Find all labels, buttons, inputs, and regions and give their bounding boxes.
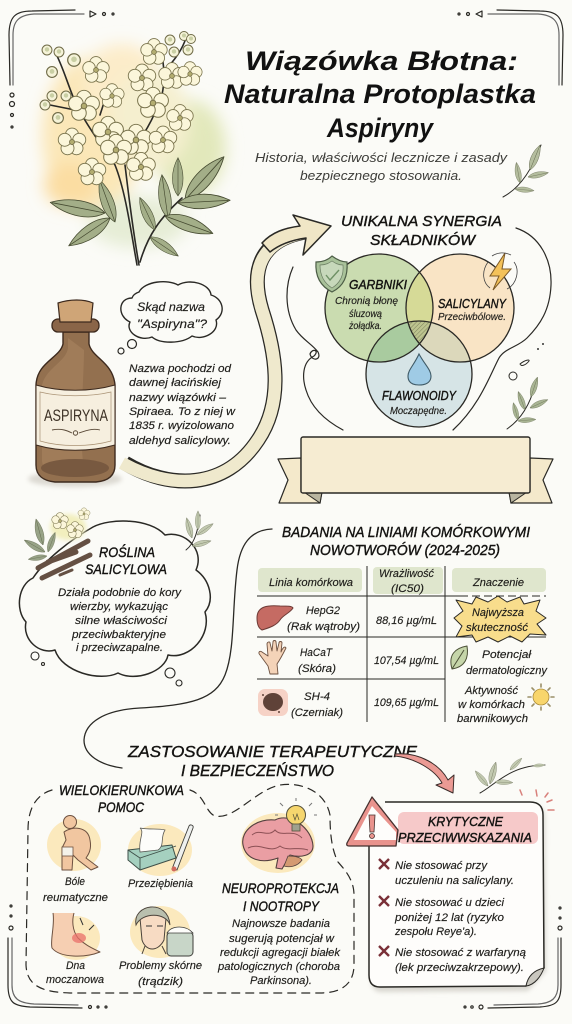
neuroprotection text: NEUROPROTEKCJA [222, 881, 339, 896]
item: warfarin [379, 946, 526, 974]
callout: highest efficacy [454, 596, 546, 642]
text block: name origin: Spiraea. To z niej w [129, 406, 236, 418]
venn: tannins: GARBNIKI [349, 278, 407, 292]
item: gout: Dna [66, 960, 85, 972]
title: Aspiryny [326, 113, 435, 143]
cloud bubbles [31, 652, 182, 686]
item: colds [128, 824, 193, 890]
item: gout [46, 913, 104, 986]
text block: name origin: dawnej łacińskiej [129, 377, 222, 389]
item: salicylate allergy [379, 859, 514, 887]
item: children [379, 896, 505, 938]
icon: hand [259, 640, 286, 674]
icon: sprig by subtitle [503, 144, 549, 197]
icon: sprig above panel [473, 756, 554, 810]
stems [50, 38, 186, 265]
callout: highest efficacy: Najwyższa [472, 607, 524, 619]
subtitle: bezpiecznego stosowania. [300, 169, 462, 183]
heading: studies: NOWOTWORÓW (2024-2025) [310, 542, 500, 559]
table header labels: Znaczenie [472, 577, 524, 589]
panel heading: POMOC [98, 800, 144, 815]
corner ornament: top left [9, 10, 114, 128]
icon: water drop [408, 354, 431, 385]
synergy outline curves [287, 228, 551, 430]
large curved arrow [122, 215, 331, 481]
item: skin problems: (trądzik) [138, 976, 183, 988]
row: SH-4: Aktywność [464, 685, 519, 697]
row: HepG2: 88,16 µg/mL [376, 615, 437, 627]
item: skin problems: Problemy skórne [119, 960, 202, 972]
row: HaCaT: Potencjał [482, 649, 532, 661]
row: HaCaT: (Skóra) [298, 663, 336, 675]
title: Naturalna Protoplastka [224, 79, 536, 109]
table: cell line studies [257, 566, 554, 725]
page curl [526, 968, 544, 986]
item: children: Nie stosować u dzieci [395, 897, 505, 909]
panel shadow and card [371, 806, 546, 992]
bottle collar [52, 319, 99, 332]
row: HaCaT [259, 640, 548, 677]
venn diagram [316, 253, 517, 427]
row: HaCaT: 107,54 µg/mL [374, 655, 439, 667]
panel heading: KRYTYCZNE [428, 814, 503, 829]
text block: name origin [129, 363, 236, 447]
icon: sprig right of venn [507, 343, 549, 429]
neuroprotection text: patologicznych (choroba [217, 961, 340, 973]
venn: tannins [335, 278, 407, 332]
venn: flavonoids: Moczapędne. [390, 406, 447, 417]
bottle label [36, 385, 115, 450]
icon: sun [528, 684, 554, 710]
cloud heading: ROŚLINA [99, 543, 155, 560]
panel: multidirectional help [26, 783, 354, 993]
item: colds: Przeziębienia [128, 878, 193, 890]
row: SH-4: w komórkach [458, 699, 525, 711]
ribbon banner [278, 437, 553, 503]
connector curve to therapeutic section [84, 529, 272, 768]
neuroprotection text: redukcji agregacji białek [220, 947, 341, 959]
title [224, 46, 536, 143]
heading: studies [282, 524, 530, 559]
icon: sprig right of cloud [184, 511, 215, 550]
cloud shape [19, 521, 210, 676]
icon: melanoma [258, 689, 288, 716]
illustration: meadowsweet plant [40, 32, 230, 265]
item: rheumatic pain: reumatyczne [43, 892, 108, 904]
bottle body [36, 332, 115, 482]
bottle label: ASPIRYNA [44, 406, 108, 425]
venn: flavonoids: FLAWONOIDY [382, 389, 457, 403]
neuroprotection text: I NOOTROPY [243, 899, 320, 914]
neuroprotection text: sugerują potencjał w [229, 933, 335, 945]
neuroprotection text: Najnowsze badania [232, 918, 330, 930]
pink heading band [398, 812, 538, 844]
venn: salicylates [438, 297, 507, 323]
corner ornament: top right [458, 10, 563, 85]
heading: synergy: SKŁADNIKÓW [370, 232, 476, 249]
cloud text: wierzby, wykazując [70, 601, 169, 613]
cloud text: i przeciwzapalne. [76, 642, 163, 654]
cloud text: przeciwbakteryjne [71, 629, 166, 641]
panel: critical contraindications [347, 797, 546, 992]
title: Wiązówka Błotna: [245, 46, 518, 76]
cloud text: Działa podobnie do kory [58, 587, 182, 599]
venn: tannins: Chronią błonę [335, 296, 398, 307]
cloud heading [85, 543, 167, 577]
venn: salicylates: SALICYLANY [438, 297, 507, 311]
text block: name origin: nazwy wiązówki – [129, 392, 227, 404]
corner ornament: bottom left [8, 905, 107, 1008]
icon: leaf [451, 646, 467, 669]
icon: lightning [484, 253, 517, 290]
row: SH-4: (Czerniak) [291, 707, 343, 719]
subtitle [255, 151, 508, 183]
row: HaCaT: HaCaT [300, 647, 333, 659]
heading: therapeutic use and safety: ZASTOSOWANIE TERAPEUTYCZNE [127, 744, 417, 761]
cloud heading: SALICYLOWA [85, 561, 167, 577]
callout: highest efficacy: skuteczność [466, 622, 529, 634]
item: warfarin: Nie stosować z warfaryną [395, 947, 526, 959]
neuroprotection text: Parkinsona). [250, 975, 312, 987]
item: salicylate allergy: Nie stosować przy [395, 860, 488, 872]
cloud text [58, 587, 182, 654]
leaves [49, 151, 230, 260]
row: HepG2: (Rak wątroby) [287, 621, 360, 633]
item: salicylate allergy: uczuleniu na salicylany. [395, 875, 514, 887]
icon: liver [257, 606, 293, 630]
row: SH-4: 109,65 µg/mL [374, 697, 439, 709]
table header labels: Wrażliwość [379, 568, 435, 580]
icon: bark and flower [22, 508, 90, 578]
item: children: zespołu Reye'a). [394, 926, 477, 938]
heading: studies: BADANIA NA LINIAMI KOMÓRKOWYMI [282, 524, 530, 541]
heading: synergy: UNIKALNA SYNERGIA [341, 214, 502, 230]
venn: salicylates: Przeciwbólowe. [438, 312, 506, 323]
thought bubble: name question: Skąd nazwa [137, 300, 205, 314]
heading: therapeutic use and safety: I BEZPIECZEŃSTWO [181, 761, 334, 780]
icon: brain and lightbulb [241, 798, 317, 873]
venn: tannins: żołądka. [348, 321, 382, 332]
cork [58, 300, 93, 322]
table header labels: Linia komórkowa [269, 577, 353, 589]
bottle [28, 300, 122, 487]
venn: tannins: śluzową [349, 309, 382, 320]
dashed outline [26, 784, 354, 993]
item: warfarin: (lek przeciwzakrzepowy). [395, 962, 524, 974]
row: SH-4: SH-4 [304, 691, 330, 703]
venn: flavonoids [382, 389, 457, 417]
heading: therapeutic use and safety [127, 744, 417, 780]
cloud text: silne właściwości [75, 615, 168, 627]
icon: shield [316, 256, 347, 292]
table header labels [269, 568, 524, 595]
item: children: poniżej 12 lat (ryzyko [394, 912, 504, 924]
row: HaCaT: dermatologiczny [466, 665, 548, 677]
row: SH-4: barwnikowych [457, 713, 528, 725]
table header labels: (IC50) [391, 583, 424, 595]
bottle shadow [28, 471, 122, 487]
heading: synergy [341, 214, 502, 249]
text block: name origin: Nazwa pochodzi od [129, 363, 232, 375]
thought bubble: name question: "Aspiryna"? [137, 317, 207, 331]
panel heading: WIELOKIERUNKOWA [59, 783, 184, 798]
watercolor wash [42, 44, 226, 248]
row: SH-4 [258, 684, 554, 725]
thought bubble: name question [118, 282, 222, 354]
icon: warning triangle [347, 797, 398, 846]
corner ornament: bottom right [464, 907, 562, 1009]
subtitle: Historia, właściwości lecznicze i zasady [255, 151, 508, 165]
cloud: salicylic plant [19, 508, 210, 686]
table grid [257, 566, 546, 722]
neuroprotection text [217, 881, 341, 987]
item: skin problems [119, 906, 202, 988]
row: HepG2 [257, 596, 546, 642]
panel heading [398, 814, 532, 845]
flowers [141, 39, 167, 64]
panel heading: PRZECIWWSKAZANIA [398, 830, 532, 845]
text block: name origin: 1835 r. wyizolowano [129, 420, 234, 432]
item: rheumatic pain [43, 816, 108, 904]
panel heading [59, 783, 184, 815]
item: gout: moczanowa [46, 974, 104, 986]
item: rheumatic pain: Bóle [65, 876, 85, 888]
text block: name origin: aldehyd salicylowy. [129, 435, 231, 447]
table header fills [258, 567, 546, 594]
arrow: to contraindications [395, 754, 454, 793]
row: HepG2: HepG2 [306, 605, 340, 617]
